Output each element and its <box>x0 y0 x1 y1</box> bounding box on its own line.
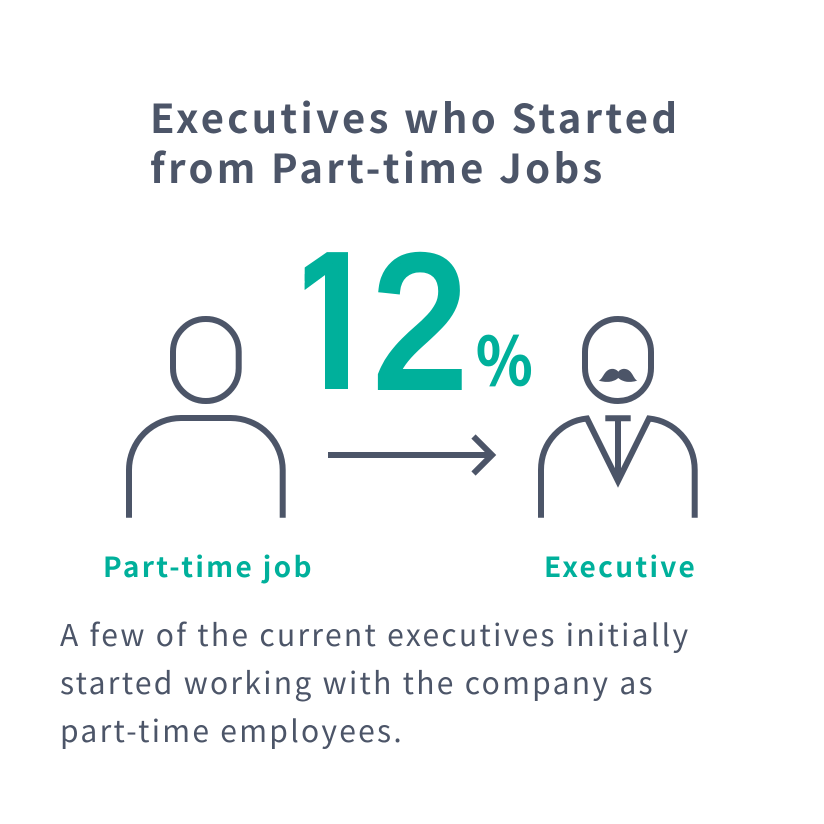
label: executive: Executive <box>544 546 697 586</box>
description text: A few of the current executives initially <box>60 611 690 655</box>
description text <box>60 611 690 751</box>
big number: 12 percent: 1 <box>280 217 385 427</box>
icon: executive <box>541 319 695 518</box>
description text: part-time employees. <box>60 707 404 751</box>
big number: 12 percent <box>304 252 462 390</box>
title: Executives who Started <box>150 87 680 145</box>
description text: started working with the company as <box>60 659 655 703</box>
percent sign: % <box>476 309 533 405</box>
arrow <box>328 436 492 474</box>
title: from Part-time Jobs <box>150 137 605 195</box>
label: part-time job: Part-time job <box>103 546 314 586</box>
title <box>150 87 680 195</box>
big number: 12 percent: 2 <box>372 217 467 426</box>
icon: part-time worker <box>129 319 283 518</box>
